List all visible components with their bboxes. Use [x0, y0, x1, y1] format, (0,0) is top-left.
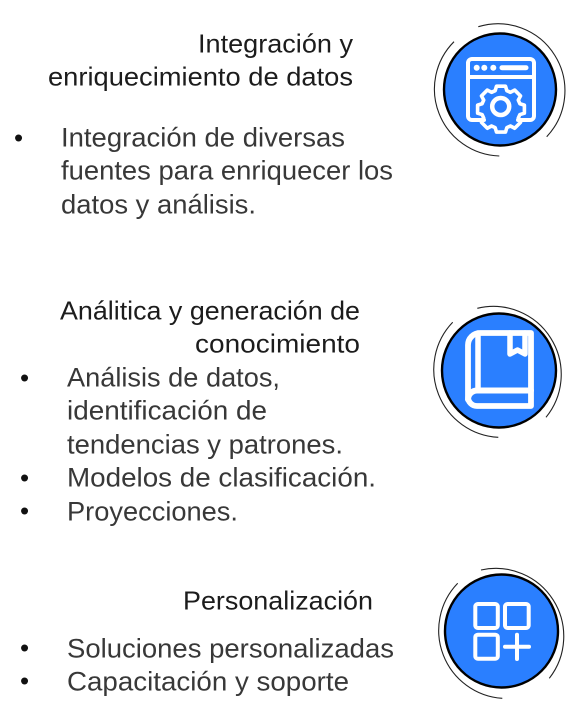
icon: squares with plus [439, 568, 564, 698]
heading: analytics: conocimiento [195, 328, 360, 358]
icon: book with bookmark [434, 306, 561, 437]
bullet list: data integration: • [14, 122, 23, 152]
bullet list: data integration: datos y análisis. [61, 189, 256, 219]
bullet list: personalization: Capacitación y soporte [67, 666, 349, 696]
heading: analytics: Análitica y generación de [60, 295, 360, 325]
bullet list: analytics: identificación de [67, 395, 267, 425]
bullet list: data integration: Integración de diversas [61, 122, 345, 152]
bullet list: personalization: • [20, 665, 29, 695]
section: personalization [20, 568, 564, 698]
heading: data integration [48, 28, 353, 91]
bullet list: data integration: fuentes para enriquecer los [61, 155, 393, 185]
section: data integration [14, 24, 565, 219]
heading: analytics [60, 295, 360, 358]
bullet list: personalization [20, 632, 394, 696]
bullet list: analytics: Proyecciones. [67, 496, 238, 526]
bullet list: analytics: Modelos de clasificación. [67, 462, 376, 492]
bullet list: analytics: Análisis de datos, [67, 362, 280, 392]
bullet list: personalization: • [20, 632, 29, 662]
heading: data integration: enriquecimiento de datos [48, 61, 353, 91]
bullet list: analytics [20, 362, 376, 526]
section: analytics [20, 295, 561, 526]
bullet list: analytics: tendencias y patrones. [67, 429, 343, 459]
bullet list: data integration [14, 122, 393, 219]
heading: personalization: Personalización [183, 586, 373, 616]
bullet list: analytics: • [20, 495, 29, 525]
icon: browser window with gear [434, 24, 565, 156]
bullet list: analytics: • [20, 362, 29, 392]
bullet list: personalization: Soluciones personalizadas [67, 633, 394, 663]
bullet list: analytics: • [20, 462, 29, 492]
heading: data integration: Integración y [198, 28, 353, 58]
